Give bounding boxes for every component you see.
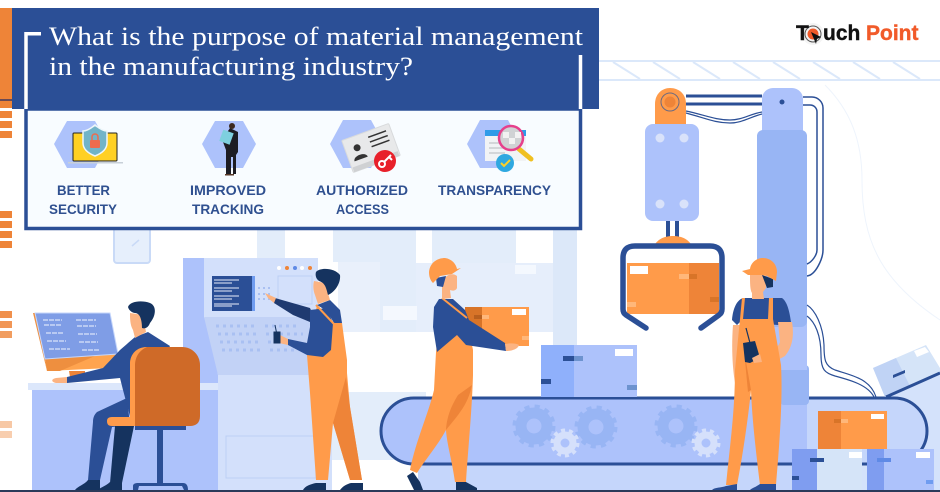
label: better security: BETTER [57, 182, 110, 198]
worker carrying box [407, 258, 529, 490]
panel: benefits [26, 109, 580, 228]
logo: TouchPoint: Point [866, 22, 918, 45]
label: better security: SECURITY [49, 201, 118, 217]
tilted box on ramp [873, 345, 940, 397]
overalls [307, 305, 362, 480]
logo: TouchPoint: uch [823, 22, 860, 45]
floor line [0, 490, 940, 492]
robot gripper with orange box [623, 246, 722, 328]
console screen [212, 276, 255, 311]
conveyor belt [381, 373, 940, 490]
cables [686, 96, 876, 397]
header band [12, 8, 599, 109]
worker at desk [52, 301, 170, 490]
far arm [274, 298, 313, 322]
label: authorized access: ACCESS [336, 201, 389, 217]
worker at console [265, 269, 363, 490]
desk [28, 383, 218, 490]
stacked boxes [792, 411, 934, 490]
benefit: transparency [438, 120, 552, 198]
title: in the manufacturing industry? [49, 52, 413, 81]
benefit: improved tracking [190, 121, 266, 217]
ceiling truss [599, 61, 940, 80]
left orange stripes [0, 8, 12, 438]
benefit: better security [49, 121, 123, 217]
carried box [465, 307, 529, 346]
icon: document with magnifier [467, 120, 531, 172]
white bracket right [579, 55, 582, 109]
indicator lights [277, 266, 312, 270]
benefit: authorized access [316, 120, 408, 217]
icon: ID card with key [330, 120, 400, 173]
icon: laptop with shield [54, 121, 123, 168]
faint background curve [825, 85, 940, 320]
control console [183, 258, 332, 490]
label: improved tracking: TRACKING [192, 201, 264, 217]
label: transparency: TRANSPARENCY [438, 182, 552, 198]
wall clock [114, 228, 150, 263]
shirt [288, 308, 333, 357]
robot column [757, 88, 809, 405]
icon: man with tablet [202, 121, 256, 176]
title: What is the purpose of material management [49, 22, 584, 51]
logo: TouchPoint: T [796, 22, 809, 45]
label: authorized access: AUTHORIZED [316, 182, 408, 198]
console buttons [216, 326, 303, 350]
white corner bracket left [26, 34, 41, 109]
worker with remote [712, 258, 793, 490]
gears [515, 407, 718, 456]
logo: TouchPoint [796, 22, 918, 45]
label: improved tracking: IMPROVED [190, 182, 266, 198]
robot arm [645, 88, 699, 246]
logo: TouchPoint: o [806, 24, 818, 45]
office chair [107, 347, 200, 490]
background factory shapes [257, 228, 577, 460]
monitor [33, 313, 118, 377]
blue box on belt [541, 345, 637, 397]
